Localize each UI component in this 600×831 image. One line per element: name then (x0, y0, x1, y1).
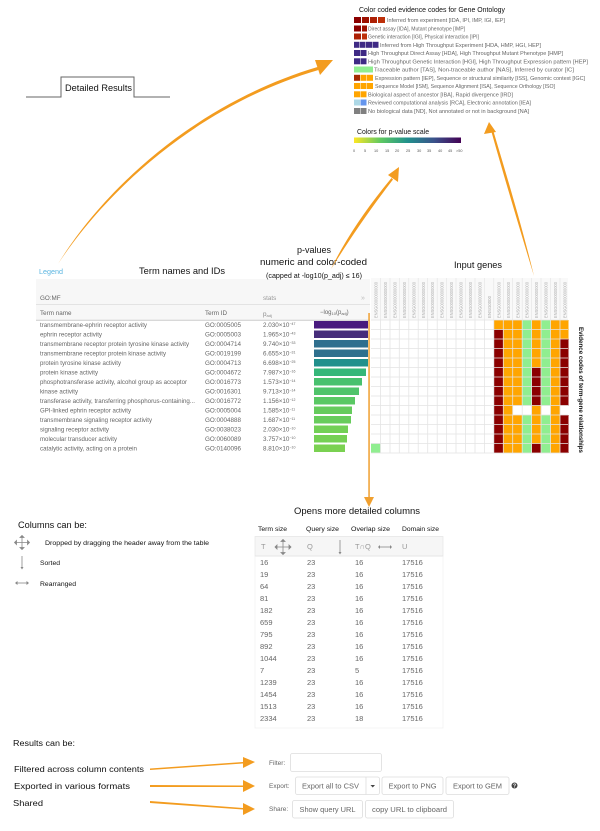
adjusted p-value column: −10 (289, 436, 295, 440)
overlap size values (355, 558, 363, 723)
panel: gene column headers: ENSG00000000000 (411, 281, 416, 318)
overlap size values: 16 (355, 690, 363, 699)
domain size values: 17516 (402, 678, 423, 687)
icon: rearrange arrow in header (378, 545, 392, 549)
query size values: 23 (307, 630, 315, 639)
term name column: protein tyrosine kinase activity (40, 360, 122, 367)
panel: results table: Term name (40, 310, 72, 317)
overlap size values: 16 (355, 606, 363, 615)
icon: move (14, 536, 30, 550)
panel: gene column headers: ENSG00000000000 (478, 281, 482, 318)
panel: gene column headers: ENSG00000000000 (440, 281, 445, 318)
panel: detailed columns table: Term size (258, 526, 287, 533)
adjusted p-value column: −12 (289, 398, 295, 402)
legend row: no biological data: No biological data [ND], Not annotated or not in background [NA] (368, 109, 530, 115)
icon: help (512, 782, 518, 790)
term name column: kinase activity (40, 388, 79, 396)
panel: gene column headers: ENSG00000000000 (496, 281, 501, 318)
adjusted p-value column: −25 (289, 360, 295, 364)
domain size values: 17516 (402, 582, 423, 591)
control: export buttons: Export all to CSV (302, 782, 359, 790)
adjusted p-value column: 1.156×10 (263, 398, 289, 405)
term name column: transmembrane receptor protein tyrosine kinase activity (40, 341, 190, 348)
adjusted p-value column: 1.687×10 (263, 417, 289, 424)
adjusted p-value column: −14 (289, 379, 295, 383)
panel: columns can be: Columns can be: (18, 520, 87, 530)
adjusted p-value column: 9.713×10 (263, 388, 289, 396)
overlap size values: 16 (355, 642, 363, 651)
panel: p-value colour scale: 45 (448, 149, 452, 153)
overlap size values: 5 (355, 666, 359, 675)
control: share buttons (269, 800, 454, 818)
panel: p-value colour scale (353, 129, 462, 153)
query size values: 23 (307, 618, 315, 627)
overlap size values: 16 (355, 702, 363, 711)
legend row: high throughput genetic interaction: High Throughput Genetic Interaction [HGI], High Throughput Expression pattern [HEP] (368, 59, 589, 65)
panel: p-value colour scale: 35 (427, 149, 431, 153)
overlap size values: 16 (355, 558, 363, 567)
legend row: traceable author: Traceable author [TAS], Non-traceable author [NAS], Inferred by curator [IC] (374, 68, 575, 74)
panel: results table: adj (267, 313, 272, 318)
adjusted p-value column: −14 (289, 388, 295, 392)
panel: gene column headers (371, 278, 568, 320)
panel: results table: Term ID (205, 310, 227, 317)
term size values: 795 (260, 630, 273, 639)
overlap size values: 16 (355, 570, 363, 579)
legend title: Color coded evidence codes for Gene Ontology (359, 5, 505, 14)
control: filter input: Filter: (269, 760, 285, 767)
adjusted p-value column: 2.030×10 (263, 426, 289, 434)
query size values: 23 (307, 690, 315, 699)
arrow: p-values to colour scale (331, 167, 399, 269)
term ID column: GO:0005005 (205, 322, 242, 329)
panel: gene column headers: ENSG00000000000 (525, 281, 530, 318)
term ID column: GO:0004888 (205, 417, 242, 424)
panel: p-value colour scale: 40 (438, 149, 442, 153)
arrow: share (150, 801, 255, 815)
query size values (307, 558, 315, 723)
panel: p-value colour scale: 5 (364, 149, 366, 153)
control: export buttons: Export: (269, 783, 290, 790)
panel: p-value colour scale: 25 (406, 149, 410, 153)
panel: p-value colour scale: >50 (456, 149, 462, 153)
panel: results table: 10 (332, 311, 337, 316)
term ID column: GO:0016773 (205, 379, 242, 386)
legend row: traceable author (354, 66, 575, 74)
panel: gene column headers: ENSG00000000000 (383, 281, 388, 318)
heading: Term names and IDs: Term names and IDs (139, 266, 225, 277)
panel: detailed columns table: T∩Q (355, 542, 371, 551)
adjusted p-value column: 7.987×10 (263, 370, 289, 376)
adjusted p-value column: −11 (289, 417, 295, 421)
adjusted p-value column: 3.757×10 (263, 436, 289, 443)
icon: move in header (275, 540, 291, 554)
panel: results can be (13, 739, 144, 808)
term ID column (205, 322, 242, 452)
term size values: 1513 (260, 702, 277, 711)
domain size values: 17516 (402, 666, 423, 675)
domain size values: 17516 (402, 606, 423, 615)
overlap size values: 16 (355, 582, 363, 591)
panel: detailed columns table (255, 526, 443, 728)
query size values: 23 (307, 666, 315, 675)
domain size values: 17516 (402, 702, 423, 711)
legend row: high throughput experiment: Inferred from High Throughput Experiment [HDA, HMP, HGI, HEP] (380, 43, 542, 49)
adjusted p-value column: 6.655×10 (263, 350, 289, 358)
adjusted p-value column: −31 (289, 350, 295, 354)
term name column: ephrin receptor activity (40, 332, 103, 338)
panel: p-value colour scale: 30 (417, 149, 421, 153)
adjusted p-value column: 1.965×10 (263, 332, 289, 338)
arrow: divider down to detailed columns (364, 313, 374, 507)
panel: gene column headers: ENSG00000000000 (459, 281, 464, 318)
term ID column: GO:0060089 (205, 436, 242, 443)
panel: results table: stats (263, 295, 276, 302)
panel: gene column headers: ENSG00000000000 (402, 281, 407, 318)
term ID column: GO:0019199 (205, 350, 242, 358)
control: share buttons: Show query URL (300, 805, 356, 814)
term name column (40, 322, 195, 452)
term name column: protein kinase activity (40, 370, 99, 376)
query size values: 23 (307, 678, 315, 687)
term name column: transferase activity, transferring phosphorus-containing... (40, 398, 195, 405)
term name column: molecular transducer activity (40, 436, 118, 443)
adjusted p-value column (263, 322, 295, 452)
legend row: high throughput direct assay: High Throughput Direct Assay [HDA], High Throughput Mutant Phenotype [HMP] (368, 51, 564, 57)
query size values: 23 (307, 642, 315, 651)
panel: p-value colour scale: 10 (374, 149, 378, 153)
term size values: 19 (260, 570, 268, 579)
term ID column: GO:0140096 (205, 446, 242, 452)
heading: p-values numeric and color-coded: numeric and color-coded (260, 257, 367, 268)
query size values: 23 (307, 702, 315, 711)
control: filter input (269, 754, 382, 772)
panel: gene column headers: ENSG00000000000 (449, 281, 454, 318)
adjusted p-value column: 6.698×10 (263, 360, 289, 367)
legend row: expression pattern: Expression pattern [IEP], Sequence or structural similarity [ISS], Genomic context [IGC] (375, 76, 586, 82)
term ID column: GO:0005004 (205, 408, 242, 414)
panel: detailed columns table: T (261, 542, 266, 551)
panel: gene column headers: ENSG00000000000 (506, 281, 511, 318)
domain size values: 17516 (402, 630, 423, 639)
panel: results table: ) (347, 310, 349, 316)
legend row: inferred from experiment (354, 17, 506, 24)
term size values: 659 (260, 618, 273, 627)
legend row: direct assay: Direct assay [IDA], Mutant phenotype [IMP] (368, 26, 466, 32)
domain size values: 17516 (402, 558, 423, 567)
panel: gene column headers: ENSG00000000000 (468, 281, 473, 318)
panel: detailed columns table: Overlap size (351, 526, 390, 533)
legend row: biological aspect of ancestor: Biological aspect of ancestor [IBA], Rapid divergence [IRD] (368, 92, 514, 98)
domain size values: 17516 (402, 594, 423, 603)
heading: Opens more detailed columns: Opens more detailed columns (294, 506, 420, 517)
control: export buttons: Export to GEM (453, 782, 502, 790)
adjusted p-value column: −43 (289, 332, 295, 336)
term ID column: GO:0005003 (205, 332, 242, 338)
term size values: 16 (260, 558, 268, 567)
panel: p-value colour scale: 0 (353, 149, 355, 153)
term size values: 64 (260, 582, 268, 591)
panel: evidence code legend (354, 5, 589, 115)
heading: Legend link: Legend (39, 267, 63, 276)
query size values: 23 (307, 594, 315, 603)
term size values: 81 (260, 594, 268, 603)
panel: gene column headers: ENSG00000000000 (562, 281, 568, 318)
term name column: transmembrane receptor protein kinase activity (40, 350, 167, 358)
domain size values: 17516 (402, 690, 423, 699)
adjusted p-value column: −10 (289, 446, 295, 450)
panel: detailed columns table: Query size (306, 526, 339, 533)
panel: results table: −log (320, 310, 332, 316)
panel: detailed columns table: Domain size (402, 526, 439, 533)
icon: help: ? (513, 784, 516, 790)
arrow: filter (150, 757, 255, 770)
term size values: 892 (260, 642, 273, 651)
overlap size values: 16 (355, 630, 363, 639)
overlap size values: 16 (355, 654, 363, 663)
query size values: 23 (307, 570, 315, 579)
term size values: 1044 (260, 654, 277, 663)
legend row: inferred from experiment: Inferred from experiment [IDA, IPI, IMP, IGI, IEP] (387, 18, 506, 24)
heading: p-values numeric and color-coded: (capped at -log10(p_adj) ≤ 16) (266, 273, 362, 280)
domain size values: 17516 (402, 642, 423, 651)
panel: results table: GO:MF (40, 295, 61, 302)
query size values: 23 (307, 714, 315, 723)
domain size values (402, 558, 423, 723)
term name column: transmembrane signaling receptor activity (40, 417, 153, 424)
query size values: 23 (307, 582, 315, 591)
control: export buttons (269, 777, 518, 794)
panel: detailed columns table: U (402, 542, 407, 551)
overlap size values: 16 (355, 618, 363, 627)
panel: results table: p (263, 311, 267, 318)
term name column: GPI-linked ephrin receptor activity (40, 408, 132, 414)
term size values: 1454 (260, 690, 277, 699)
query size values: 23 (307, 606, 315, 615)
panel: gene column headers: ENSG00000000000 (430, 281, 435, 318)
term size values: 2334 (260, 714, 277, 723)
panel: gene column headers: ENSG00000000000 (534, 281, 539, 318)
term name column: signaling receptor activity (40, 426, 110, 434)
domain size values: 17516 (402, 570, 423, 579)
panel: gene column headers: ENSG00000000000 (544, 281, 549, 318)
panel: columns can be: Dropped by dragging the header away from the table (45, 540, 209, 547)
panel: results can be: Filtered across column contents (14, 764, 144, 774)
panel: columns can be: Sorted (40, 560, 60, 567)
panel: p-value colour scale: 20 (395, 149, 399, 153)
panel: results can be: Exported in various formats (14, 781, 130, 791)
panel: gene column headers: ENSG00000000000 (515, 281, 520, 318)
query size values: 23 (307, 654, 315, 663)
bar chart: -log10 p-adj (314, 321, 368, 452)
legend row: reviewed computational analysis: Reviewed computational analysis [RCA], Electronic annotation [IEA] (368, 100, 532, 106)
overlap size values: 16 (355, 678, 363, 687)
panel: gene column headers: ENSG00000000000 (553, 281, 558, 318)
panel: results table (36, 279, 370, 452)
legend row: sequence model: Sequence Model [ISM], Sequence Alignment [ISA], Sequence Orthology [ISO] (375, 84, 556, 90)
control: export buttons: Export to PNG (388, 782, 437, 790)
heading: Input genes: Input genes (454, 260, 502, 271)
panel: results table: » (361, 295, 365, 302)
domain size values: 17516 (402, 654, 423, 663)
overlap size values: 18 (355, 714, 363, 723)
query size values: 23 (307, 558, 315, 567)
legend row: high throughput experiment (354, 42, 542, 49)
heading: Detailed Results tab (26, 77, 170, 97)
panel: gene column headers: ENSG0000 (487, 295, 492, 318)
panel: p-value colour scale: 15 (385, 149, 389, 153)
adjusted p-value column: 9.740×10 (263, 341, 289, 348)
heading: p-values numeric and color-coded (260, 245, 367, 280)
panel: results table: adj (341, 311, 347, 316)
domain size values: 17516 (402, 618, 423, 627)
adjusted p-value column: −10 (289, 426, 295, 430)
term ID column: GO:0016301 (205, 388, 242, 396)
term ID column: GO:0004714 (205, 341, 242, 348)
term ID column: GO:0004713 (205, 360, 242, 367)
adjusted p-value column: 1.585×10 (263, 408, 289, 414)
term ID column: GO:0038023 (205, 426, 242, 434)
icon: rearrange arrow (15, 581, 29, 585)
panel: columns can be (14, 520, 209, 588)
arrow: legend to evidence code key (58, 60, 333, 264)
heatmap: term-gene evidence codes (371, 320, 568, 453)
term size values: 7 (260, 666, 264, 675)
label: evidence codes of term-gene relationships: Evidence codes of term-gene relationships (577, 327, 584, 453)
adjusted p-value column: 1.573×10 (263, 379, 289, 386)
adjusted p-value column: −33 (289, 341, 295, 345)
panel: gene column headers: ENSG00000000000 (374, 281, 378, 318)
panel: columns can be: Rearranged (40, 581, 76, 588)
adjusted p-value column: −16 (289, 370, 295, 374)
term name column: phosphotransferase activity, alcohol group as acceptor (40, 379, 187, 386)
arrow: export (150, 780, 255, 792)
panel: p-value colour scale: Colors for p-value scale (357, 129, 429, 136)
panel: gene column headers: ENSG00000000000 (392, 281, 398, 318)
term ID column: GO:0016772 (205, 398, 242, 405)
panel: results can be: Results can be: (13, 739, 75, 748)
arrow: input genes to evidence code key (484, 122, 534, 276)
icon: sort arrow (20, 556, 24, 570)
adjusted p-value column: −11 (289, 408, 295, 412)
panel: results can be: Shared (13, 798, 43, 808)
adjusted p-value column: 8.810×10 (263, 446, 289, 452)
term ID column: GO:0004672 (205, 370, 242, 376)
control: share buttons: copy URL to clipboard (372, 805, 447, 814)
panel: results table: (p (336, 310, 342, 316)
icon: sort arrow in header (338, 540, 342, 554)
adjusted p-value column: 2.030×10 (263, 322, 289, 329)
term name column: transmembrane-ephrin receptor activity (40, 322, 148, 329)
adjusted p-value column: −47 (289, 322, 295, 326)
panel: gene column headers: ENSG00000000000 (421, 281, 426, 318)
legend row: genetic interaction: Genetic interaction [IGI], Physical interaction [IPI] (368, 34, 480, 40)
control: share buttons: Share: (269, 806, 288, 813)
heading: p-values numeric and color-coded: p-values (297, 245, 331, 256)
heading: Detailed Results tab: Detailed Results (65, 83, 133, 93)
term name column: catalytic activity, acting on a protein (40, 446, 137, 452)
term size values: 1239 (260, 678, 277, 687)
overlap size values: 16 (355, 594, 363, 603)
term size values: 182 (260, 606, 273, 615)
term size values (260, 558, 277, 723)
panel: detailed columns table: Q (307, 542, 313, 551)
domain size values: 17516 (402, 714, 423, 723)
